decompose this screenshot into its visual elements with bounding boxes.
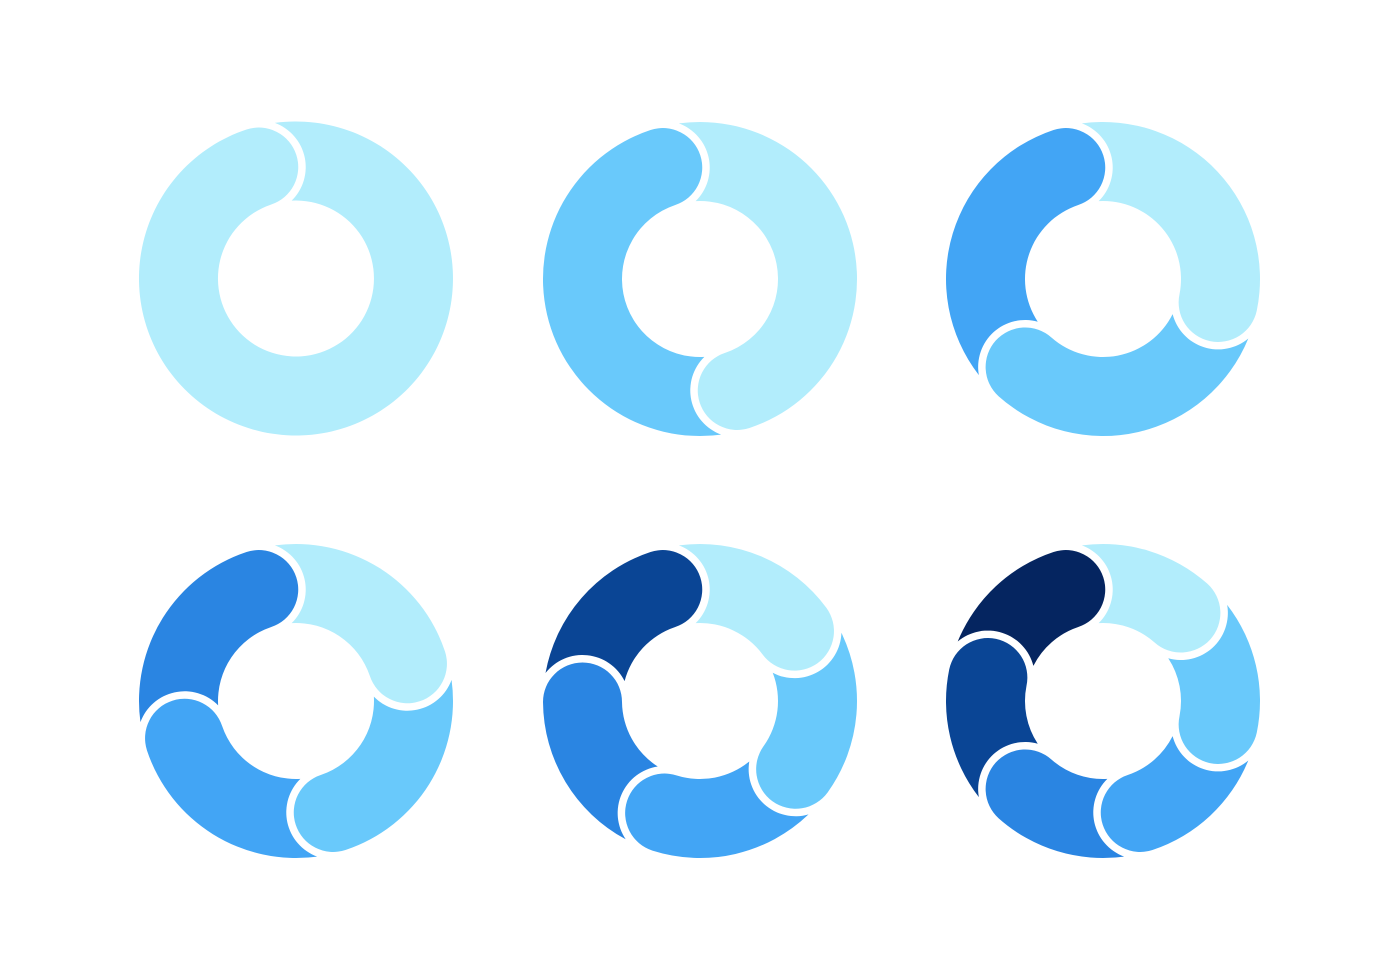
segment 2 of 2: sky blue (502, 118, 784, 474)
segment 1 of 1: light cyan (98, 81, 494, 476)
segment 3 of 5: medium blue (615, 729, 818, 893)
segment 5 of 5: deep blue (520, 540, 724, 704)
segment 1 of 6: light cyan (1051, 504, 1237, 686)
donut: four segments (101, 506, 491, 896)
segment 4 of 5: strong blue (543, 662, 658, 839)
segment 1 of 3: light cyan (1043, 114, 1289, 349)
segment 3 of 3: medium blue (905, 118, 1156, 378)
segment 4 of 4: strong blue (101, 540, 326, 730)
segment 1 of 5: light cyan (653, 497, 850, 707)
segment 3 of 4: medium blue (135, 671, 325, 896)
donut: six segments (925, 504, 1281, 898)
segment 1 of 4: light cyan (267, 506, 457, 731)
segment 2 of 4: sky blue (266, 672, 491, 862)
donut: five segments (520, 497, 908, 893)
donut: three segments (905, 114, 1289, 501)
segment 2 of 5: sky blue (712, 614, 908, 824)
donut: two segments (502, 84, 898, 474)
segment 2 of 6: sky blue (1149, 595, 1281, 771)
donut: one segment (98, 81, 494, 476)
segment 5 of 6: deep blue (925, 631, 1057, 807)
segment 2 of 3: sky blue (969, 214, 1255, 501)
segment 1 of 2: light cyan (616, 84, 898, 440)
segment 6 of 6: navy (941, 540, 1123, 686)
segment 4 of 6: strong blue (969, 716, 1155, 898)
segment 3 of 6: medium blue (1083, 716, 1265, 862)
